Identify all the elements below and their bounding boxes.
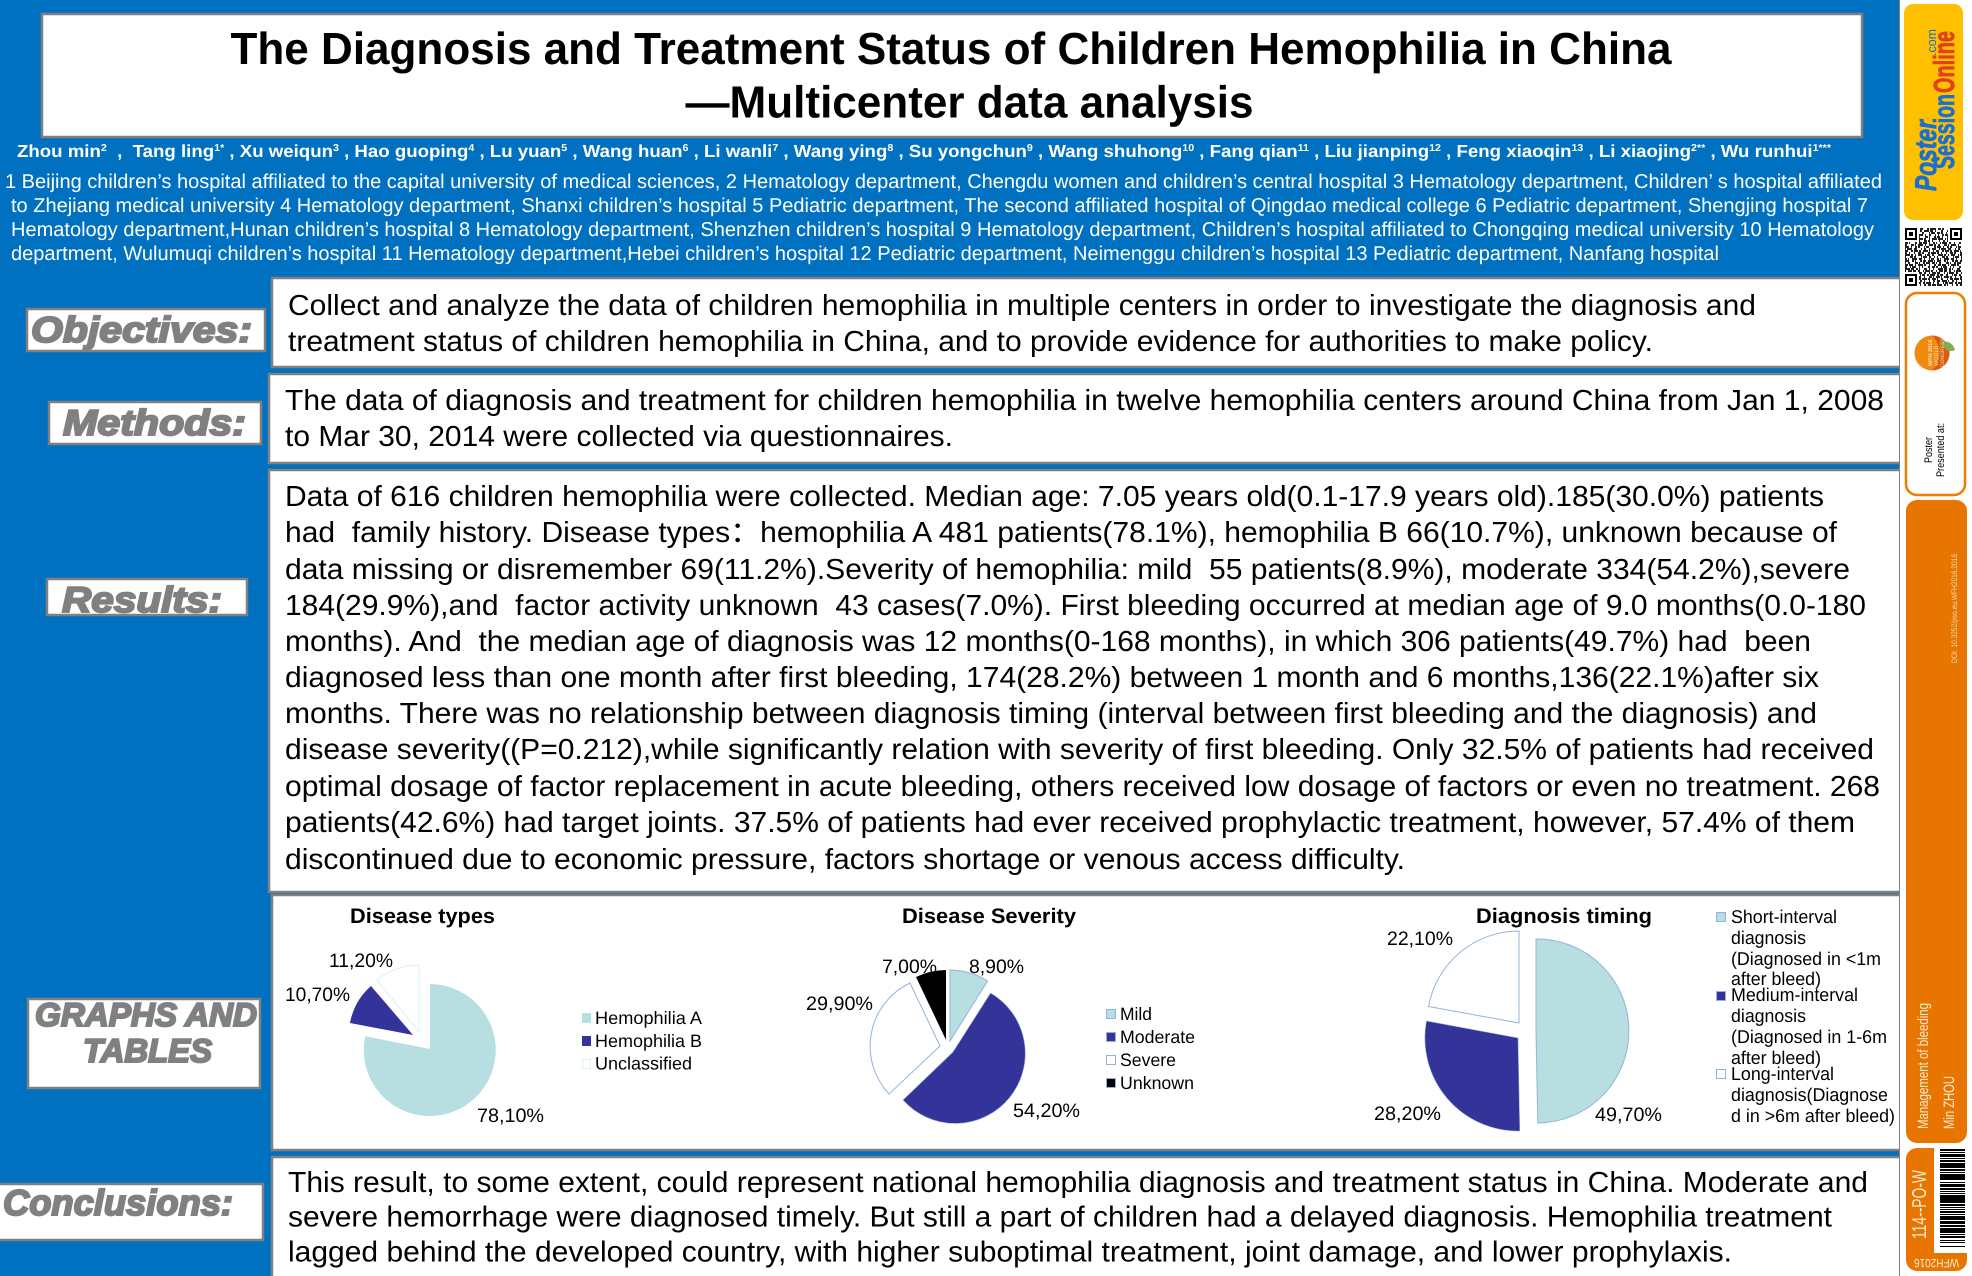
sidebar: presented at box: Poster: [1923, 437, 1935, 463]
panel: conclusions: severe hemorrhage were diagnosed timely. But still a part of children had a delayed diagnosis. Hemophilia treatment: [288, 1202, 1832, 1234]
panel: results: patients(42.6%) had target joints. 37.5% of patients had ever received prophylactic treatment, however, 57.4% of them: [285, 807, 1855, 839]
legend: disease severity: [1106, 1004, 1195, 1093]
legend: diagnosis timing: Long-interval: [1731, 1063, 1834, 1084]
sidebar: orange session panel: Min ZHOU: [1941, 1076, 1958, 1129]
chart: diagnosis timing pie: 28,20%: [1374, 1103, 1441, 1125]
sidebar: orange session panel: [1906, 500, 1967, 1143]
legend: disease types: [582, 1008, 702, 1074]
legend: disease severity: Unknown: [1120, 1073, 1194, 1093]
panel: conclusions: [272, 1157, 1912, 1276]
sidebar: poster id and barcode: 114--PO-W: [1909, 1170, 1931, 1239]
sidebar: presented at box: [1906, 293, 1965, 495]
panel: objectives: [272, 278, 1912, 367]
title box: —Multicenter data analysis: [686, 76, 1254, 128]
legend: disease severity: Moderate: [1120, 1027, 1195, 1047]
affiliations: [5, 171, 1882, 265]
panel: results: disease severity((P=0.212),while significantly relation with severity of first bleeding. Only 32.5% of patients had received: [285, 734, 1874, 766]
chart: diagnosis timing pie: 49,70%: [1595, 1104, 1662, 1126]
sidebar: poster session online logo: [1904, 4, 1963, 220]
title box: [42, 14, 1862, 137]
panel: results: discontinued due to economic pressure, factors shortage or venous access difficulty.: [285, 844, 1405, 876]
panel: conclusions: This result, to some extent, could represent national hemophilia diagnosis and treatment status in China. Moderate and: [288, 1167, 1868, 1199]
chart: disease types pie: 78,10%: [477, 1105, 544, 1127]
legend: diagnosis timing: d in >6m after bleed): [1731, 1105, 1895, 1126]
sidebar: presented at box: WFH 2016: [1928, 340, 1934, 366]
chart: disease types pie: 10,70%: [285, 984, 350, 1006]
sidebar: poster session online logo: Session: [1929, 94, 1961, 169]
sidebar: orange session panel: Management of bleeding: [1915, 1003, 1932, 1129]
chart: disease severity pie: [806, 905, 1080, 1123]
title box: The Diagnosis and Treatment Status of Children Hemophilia in China: [230, 23, 1672, 74]
sidebar: presented at box: CONGRESS: [1940, 338, 1946, 367]
legend: diagnosis timing: diagnosis(Diagnose: [1731, 1084, 1888, 1105]
panel: results: diagnosed less than one month after first bleeding, 174(28.2%) between 1 month and 6 months,136(22.1%)after six: [285, 662, 1820, 694]
legend: disease severity: Severe: [1120, 1050, 1176, 1070]
chart: diagnosis timing pie: 22,10%: [1387, 928, 1453, 950]
legend: disease severity: Mild: [1120, 1004, 1152, 1024]
chart: disease severity pie: 29,90%: [806, 993, 873, 1015]
panel: results: optimal dosage of factor replacement in acute bleeding, others received low dosage of factors or even no treatment. 268: [285, 771, 1880, 803]
sidebar: poster session online logo: Online: [1929, 31, 1961, 93]
label: objectives: Objectives:: [31, 309, 252, 350]
panel: results: Data of 616 children hemophilia were collected. Median age: 7.05 years old(0.1-17.9 years old).185(30.0%) patients: [285, 481, 1824, 513]
affiliations: Hematology department,Hunan children’s hospital 8 Hematology department, Shenzhen children’s hospital 9 Hematology department, Children’s hospital affiliated to Chongqing medical university 10 Hematology: [11, 219, 1874, 241]
panel: results: had family history. Disease types：hemophilia A 481 patients(78.1%), hemophilia B 66(10.7%), unknown because of: [285, 517, 1838, 549]
chart: disease types pie: 11,20%: [329, 950, 393, 972]
panel: results: months). And the median age of diagnosis was 12 months(0-168 months), in which 306 patients(49.7%) had been: [285, 626, 1811, 658]
panel: methods: The data of diagnosis and treatment for children hemophilia in twelve hemophilia centers around China from Jan 1, 2008: [285, 385, 1884, 417]
label: conclusions: Conclusions:: [3, 1182, 233, 1223]
label: methods: Methods:: [63, 402, 246, 443]
sidebar: presented at box: WORLD: [1934, 346, 1940, 366]
sidebar: poster session online logo: .com: [1924, 29, 1939, 56]
panel: methods: [269, 374, 1909, 463]
sidebar: QR code: [1905, 228, 1962, 286]
panel: conclusions: lagged behind the developed country, with higher suboptimal treatment, joint damage, and lower prophylaxis.: [288, 1236, 1732, 1268]
chart: disease severity pie: 7,00%: [882, 956, 937, 978]
panel: results: 184(29.9%),and factor activity unknown 43 cases(7.0%). First bleeding occurred at median age of 9.0 months(0.0-180: [285, 590, 1866, 622]
legend: diagnosis timing: Short-interval: [1731, 906, 1837, 927]
legend: diagnosis timing: diagnosis: [1731, 1005, 1806, 1026]
legend: diagnosis timing: [1716, 906, 1895, 1126]
panel: results: data missing or disremember 69(11.2%).Severity of hemophilia: mild 55 patients(8.9%), moderate 334(54.2%),severe: [285, 554, 1850, 586]
affiliations: department, Wulumuqi children’s hospital 11 Hematology department,Hebei children’s hospital 12 Pediatric department, Neimenggu children’s hospital 13 Pediatric department, Nanfang hospital: [11, 243, 1719, 265]
legend: disease types: Hemophilia A: [595, 1008, 702, 1028]
chart: disease severity pie: 8,90%: [969, 956, 1024, 978]
affiliations: to Zhejiang medical university 4 Hematology department, Shanxi children’s hospital 5 Pediatric department, The second affiliated hospital of Qingdao medical college 6 Pediatric department, Shengjing hospital 7: [11, 195, 1868, 217]
legend: diagnosis timing: after bleed): [1731, 968, 1821, 989]
legend: diagnosis timing: after bleed): [1731, 1047, 1821, 1068]
sidebar: poster session online logo: Poster: [1910, 118, 1943, 191]
panel: objectives: Collect and analyze the data of children hemophilia in multiple centers in order to investigate the diagnosis and: [288, 290, 1756, 322]
sidebar: poster id and barcode: [1906, 1148, 1967, 1271]
chart: diagnosis timing pie: [1374, 905, 1662, 1131]
label: results: Results:: [62, 579, 222, 620]
chart: disease types pie: [285, 905, 544, 1127]
panel: graphs: [272, 895, 1912, 1150]
chart: disease severity pie: 54,20%: [1013, 1100, 1080, 1122]
sidebar: presented at box: Presented at:: [1935, 423, 1947, 477]
label: graphs and tables: GRAPHS AND: [35, 996, 257, 1033]
legend: diagnosis timing: Medium-interval: [1731, 984, 1858, 1005]
panel: methods: to Mar 30, 2014 were collected via questionnaires.: [285, 421, 953, 453]
sidebar: orange session panel: DOI: 10.3252/pso.eu.WFH2016.2016: [1950, 554, 1959, 663]
panel: results: months. There was no relationship between diagnosis timing (interval between first bleeding and the diagnosis) and: [285, 698, 1817, 730]
sidebar background: [1899, 0, 1972, 1276]
affiliations: 1 Beijing children’s hospital affiliated to the capital university of medical sciences, 2 Hematology department, Chengdu women and children’s central hospital 3 Hematology department, Children’ s hospital affiliated: [5, 171, 1882, 193]
label: graphs and tables: [28, 996, 260, 1088]
legend: disease types: Unclassified: [595, 1054, 692, 1074]
label: conclusions: [0, 1182, 263, 1240]
chart: disease severity pie: Disease Severity: [902, 905, 1076, 928]
legend: diagnosis timing: (Diagnosed in <1m: [1731, 948, 1881, 969]
chart: diagnosis timing pie: Diagnosis timing: [1476, 905, 1652, 928]
legend: diagnosis timing: (Diagnosed in 1-6m: [1731, 1026, 1887, 1047]
authors line: Zhou min 2 , Tang ling 1* , Xu weiqun 3 , Hao guoping 4 , Lu yuan 5 , Wang huan 6 , Li wanli 7 , Wang ying 8 , Su yongchun 9 , Wang shuhong 10 , Fang qian 11 , Liu jianping 12 , Feng xiaoqin 13 , Li xiaojing 2** , Wu runhui 1***: [17, 141, 1831, 161]
panel: objectives: treatment status of children hemophilia in China, and to provide evidence for authorities to make policy.: [288, 326, 1653, 358]
legend: disease types: Hemophilia B: [595, 1031, 702, 1051]
chart: disease types pie: Disease types: [350, 905, 495, 928]
label: graphs and tables: TABLES: [83, 1032, 212, 1069]
sidebar: poster id and barcode: WFH2016: [1914, 1256, 1959, 1270]
panel: results: [269, 470, 1909, 892]
legend: diagnosis timing: diagnosis: [1731, 927, 1806, 948]
